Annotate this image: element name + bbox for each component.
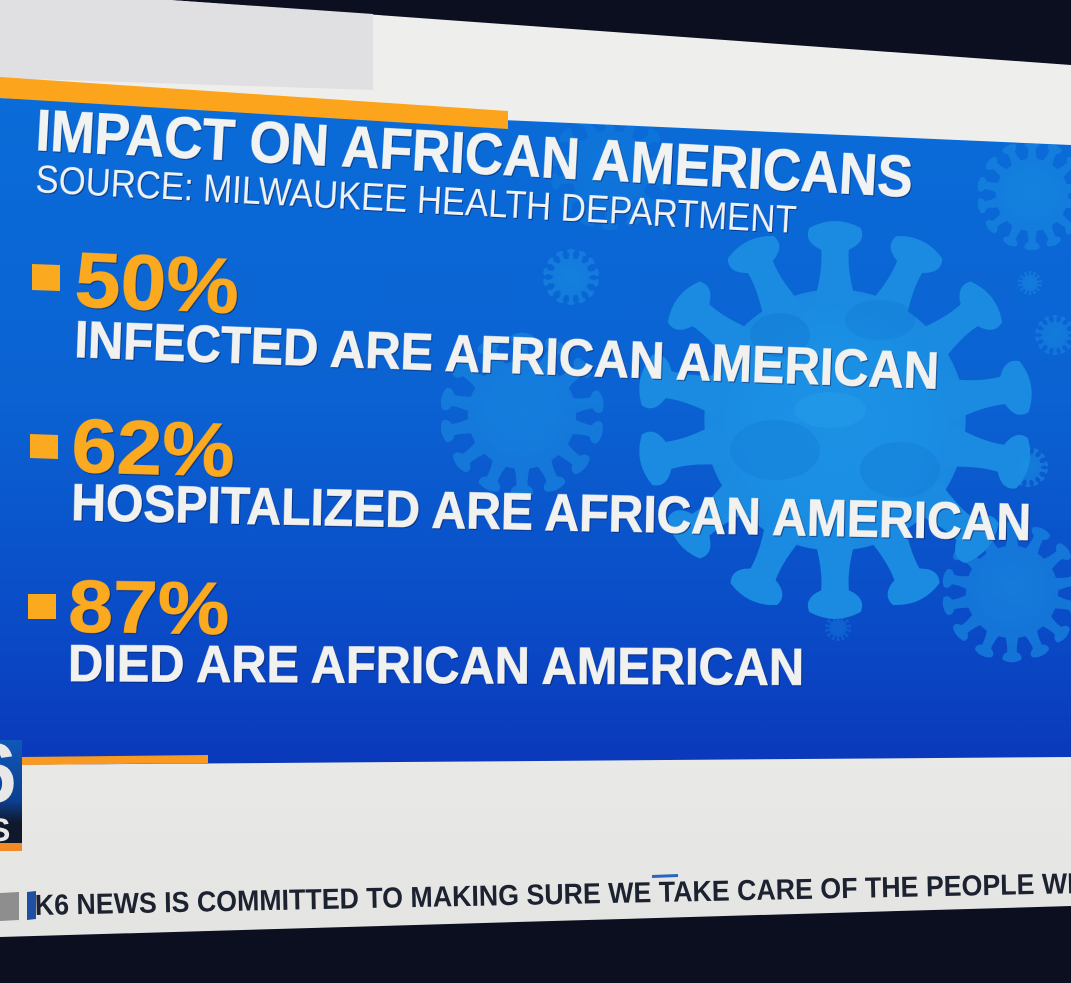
- stat number 50%: 50%: [73, 235, 241, 330]
- stat 3: [28, 565, 804, 697]
- tiny virus far right: [1035, 315, 1071, 355]
- stat label: INFECTED ARE AFRICAN AMERICAN: [74, 311, 940, 401]
- white upper screen area: [0, 0, 1071, 150]
- bullet square: [30, 434, 58, 459]
- title: IMPACT ON AFRICAN AMERICANS: [34, 98, 915, 210]
- white lower screen area: [0, 752, 1071, 937]
- tiny virus right: [1019, 447, 1048, 487]
- blue graphic panel: [0, 98, 1071, 765]
- stat label: DIED ARE AFRICAN AMERICAN: [68, 635, 804, 697]
- stat number 62%: 62%: [71, 404, 236, 494]
- virus upper right: [976, 140, 1071, 250]
- medium virus left: [439, 333, 605, 497]
- small virus: [543, 249, 599, 305]
- ticker: [0, 868, 1071, 922]
- orange top accent bar: [0, 77, 508, 129]
- orange lower accent bar: [22, 755, 208, 765]
- bullet square: [32, 264, 60, 291]
- tiny virus bottom: [825, 618, 851, 641]
- stat number 87%: 87%: [68, 565, 230, 650]
- station logo bug: [0, 740, 22, 851]
- large virus: [635, 221, 1036, 619]
- virus top: [551, 123, 668, 230]
- stat 1: [32, 235, 940, 401]
- ticker grey block: [0, 892, 19, 921]
- source line: SOURCE: MILWAUKEE HEALTH DEPARTMENT: [35, 158, 798, 242]
- virus lower right: [941, 522, 1071, 662]
- coronavirus background illustrations: [439, 110, 1071, 662]
- ticker blue marker: [27, 891, 36, 920]
- tiny virus upper: [1018, 271, 1042, 295]
- stat 2: [30, 404, 1032, 552]
- ticker blue tick: [652, 874, 678, 878]
- bullet square: [28, 594, 56, 619]
